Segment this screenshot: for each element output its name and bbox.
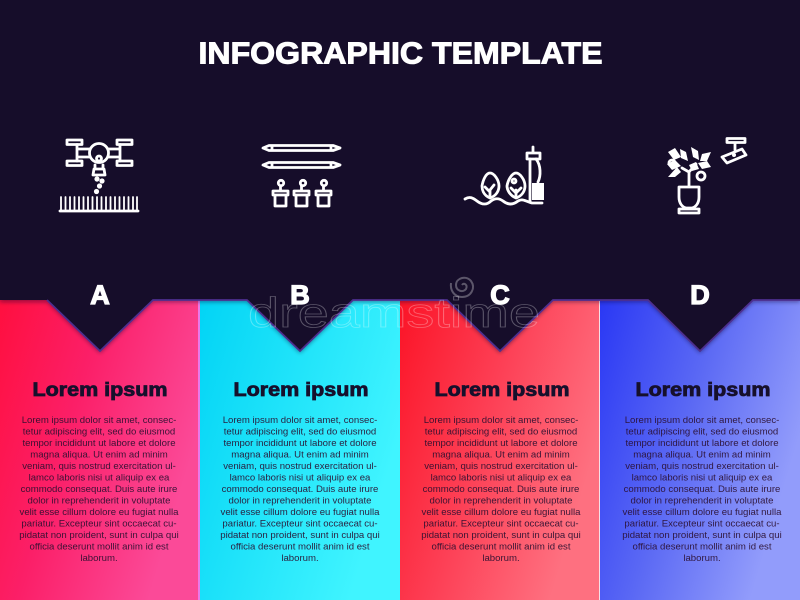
text block: A: laborum. xyxy=(80,553,118,564)
letter A: A xyxy=(90,280,110,310)
text block: A: lamco laboris nisi ut aliquip ex ea xyxy=(29,472,170,484)
text block: C: pariatur. Excepteur sint occaecat cu- xyxy=(423,518,579,530)
text block: D: tempor incididunt ut labore et dolore xyxy=(625,438,779,449)
panel: B xyxy=(200,300,400,600)
text block: C: velit esse cillum dolore eu fugiat nulla xyxy=(422,507,581,518)
text block: D: tetur adipiscing elit, sed do eiusmod xyxy=(626,426,778,438)
letter D: D xyxy=(690,280,710,310)
text block: A: pidatat non proident, sunt in culpa qui xyxy=(19,530,179,541)
panel: D xyxy=(600,300,800,600)
text block: D: Lorem ipsum dolor sit amet, consec- xyxy=(625,415,779,426)
text block: C: pidatat non proident, sunt in culpa qui xyxy=(421,530,581,541)
letter B: B xyxy=(290,280,310,310)
text block: C: dolor in reprehenderit in voluptate xyxy=(430,496,572,506)
text block: D: laborum. xyxy=(683,553,721,564)
text block: B xyxy=(220,415,380,564)
text block: B: lamco laboris nisi ut aliquip ex ea xyxy=(230,472,371,484)
letter C: C xyxy=(490,280,510,310)
text block: B: tetur adipiscing elit, sed do eiusmod xyxy=(224,426,376,438)
text block: D: magna aliqua. Ut enim ad minim xyxy=(633,450,771,460)
heading: C: Lorem ipsum xyxy=(434,380,570,401)
text block: A: pariatur. Excepteur sint occaecat cu- xyxy=(21,518,177,530)
icon: grow lights over potted plants xyxy=(263,146,340,206)
notch outline xyxy=(47,300,800,351)
text block: D: lamco laboris nisi ut aliquip ex ea xyxy=(632,472,773,484)
icon: irrigation robot over grass xyxy=(60,140,138,211)
text block: D: velit esse cillum dolore eu fugiat nulla xyxy=(623,507,782,518)
text block: B: commodo consequat. Duis aute irure xyxy=(222,484,378,495)
text block: A: velit esse cillum dolore eu fugiat nulla xyxy=(20,507,179,518)
text block: C: veniam, quis nostrud exercitation ul- xyxy=(424,461,578,472)
text block: B: magna aliqua. Ut enim ad minim xyxy=(231,450,369,460)
icon: two seedlings with spray bottle xyxy=(465,147,544,204)
heading: B: Lorem ipsum xyxy=(234,380,368,401)
panel: C xyxy=(400,300,600,600)
text block: D: dolor in reprehenderit in voluptate xyxy=(631,496,773,506)
watermark xyxy=(248,278,540,336)
text block: A: tempor incididunt ut labore et dolore xyxy=(22,438,176,449)
text block: A: tetur adipiscing elit, sed do eiusmod xyxy=(23,426,175,438)
text block: A xyxy=(19,415,179,564)
title: INFOGRAPHIC TEMPLATE xyxy=(198,36,602,70)
text block: B: pariatur. Excepteur sint occaecat cu- xyxy=(222,518,378,530)
text block: B: velit esse cillum dolore eu fugiat nulla xyxy=(221,507,380,518)
text block: A: dolor in reprehenderit in voluptate xyxy=(28,496,170,506)
text block: B: veniam, quis nostrud exercitation ul- xyxy=(223,461,377,472)
text block: B: tempor incididunt ut labore et dolore xyxy=(223,438,377,449)
text block: D: officia deserunt mollit anim id est xyxy=(632,542,772,552)
watermark: dreamstime xyxy=(248,289,540,336)
icon: potted plant with security camera xyxy=(667,138,746,213)
text block: A: officia deserunt mollit anim id est xyxy=(30,542,169,552)
text block: D xyxy=(622,415,782,564)
text block: B: pidatat non proident, sunt in culpa qui xyxy=(220,530,380,541)
text block: A: magna aliqua. Ut enim ad minim xyxy=(30,450,168,460)
text block: C: laborum. xyxy=(482,553,520,564)
heading: A: Lorem ipsum xyxy=(32,380,168,401)
text block: A: veniam, quis nostrud exercitation ul- xyxy=(22,461,176,472)
text block: A: commodo consequat. Duis aute irure xyxy=(21,484,177,495)
panel: A xyxy=(0,300,200,600)
text block: A: Lorem ipsum dolor sit amet, consec- xyxy=(22,415,176,426)
text block: B: officia deserunt mollit anim id est xyxy=(230,542,370,552)
text block: C: commodo consequat. Duis aute irure xyxy=(423,484,579,495)
text block: B: laborum. xyxy=(281,553,319,564)
text block: B: Lorem ipsum dolor sit amet, consec- xyxy=(223,415,377,426)
text block: C: magna aliqua. Ut enim ad minim xyxy=(432,450,570,460)
text block: C: lamco laboris nisi ut aliquip ex ea xyxy=(431,472,572,484)
heading: D: Lorem ipsum xyxy=(636,380,770,401)
text block: D: pidatat non proident, sunt in culpa qui xyxy=(622,530,782,541)
notched header edge xyxy=(0,0,800,351)
text block: D: veniam, quis nostrud exercitation ul- xyxy=(625,461,779,472)
text block: D: commodo consequat. Duis aute irure xyxy=(624,484,780,495)
text block: C: tempor incididunt ut labore et dolore xyxy=(424,438,578,449)
text block: C: officia deserunt mollit anim id est xyxy=(432,542,571,552)
text block: B: dolor in reprehenderit in voluptate xyxy=(229,496,371,506)
text block: C: Lorem ipsum dolor sit amet, consec- xyxy=(424,415,578,426)
text block: C: tetur adipiscing elit, sed do eiusmod xyxy=(425,426,577,438)
text block: C xyxy=(421,415,581,564)
text block: D: pariatur. Excepteur sint occaecat cu- xyxy=(624,518,780,530)
